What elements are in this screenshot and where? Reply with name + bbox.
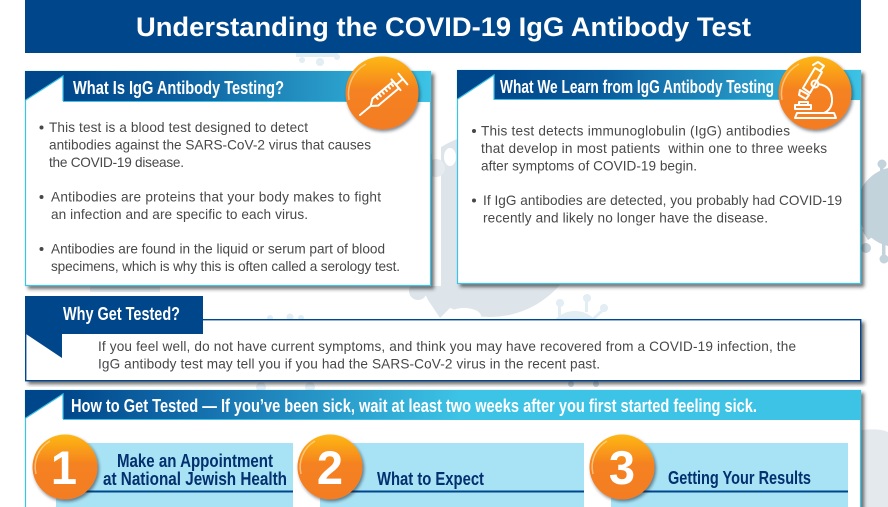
step 2: What to Expect [298, 434, 584, 507]
panel text: what is testing: Antibodies are found in the liquid or serum part of blood [51, 242, 385, 256]
panel header: How to Get Tested [25, 390, 861, 420]
step 1: Make an Appointment: at National Jewish Health [103, 469, 287, 489]
panel header: What Is IgG Antibody Testing [25, 71, 431, 102]
tab: Why Get Tested heading [25, 296, 203, 358]
panel text: what is testing: the COVID-19 disease. [49, 155, 184, 170]
step 1: Make an Appointment: Make an Appointment [117, 451, 273, 471]
title banner [25, 0, 861, 53]
text: why get tested [98, 339, 796, 372]
panel text: what is testing: Antibodies are proteins that your body makes to fight [51, 190, 381, 204]
panel text: what we learn [472, 124, 842, 226]
step 2: What to Expect: 2 [317, 441, 343, 494]
panel text: what is testing: This test is a blood test designed to detect [49, 120, 308, 135]
panel header: What We Learn: What We Learn from IgG Antibody Testing [500, 76, 774, 97]
panel text: what we learn: recently and likely no longer have the disease. [483, 210, 768, 226]
text: why get tested: IgG antibody test may tell you if you had the SARS-CoV-2 virus in the recent past. [98, 356, 600, 372]
panel: How to Get Tested [25, 390, 861, 507]
step 3: Getting Your Results: Getting Your Results [668, 468, 811, 488]
panel text: what we learn: after symptoms of COVID-19 begin. [481, 158, 697, 174]
step 3: Getting Your Results: 3 [609, 441, 635, 494]
panel: What Is IgG Antibody Testing [25, 56, 431, 286]
panel text: what is testing: specimens, which is why this is often called a serology test. [51, 259, 400, 274]
step 1: Make an Appointment: 1 [51, 441, 77, 494]
step 1: Make an Appointment [32, 434, 293, 507]
icon: microscope [778, 56, 852, 130]
text: why get tested: If you feel well, do not have current symptoms, and think you may have recovered from a COVID-19 infection, the [98, 339, 796, 354]
panel text: what we learn: that develop in most patients within one to three weeks [481, 141, 827, 156]
panel header: What We Learn [457, 70, 861, 100]
panel text: what we learn: If IgG antibodies are detected, you probably had COVID-19 [483, 193, 842, 208]
step 2: What to Expect: What to Expect [377, 469, 484, 489]
panel: Why Get Tested [25, 296, 861, 381]
panel text: what is testing: antibodies against the SARS-CoV-2 virus that causes [49, 138, 371, 152]
panel text: what is testing: an infection and are specific to each virus. [51, 207, 308, 222]
icon: syringe [346, 56, 418, 130]
panel text: what is testing [40, 120, 400, 274]
panel header: What Is IgG Antibody Testing: What Is IgG Antibody Testing? [73, 77, 284, 98]
title banner: Understanding the COVID-19 IgG Antibody Test [136, 12, 751, 42]
step 3: Getting Your Results [590, 434, 848, 507]
panel: What We Learn from IgG Antibody Testing [457, 56, 861, 284]
panel text: what we learn: This test detects immunoglobulin (IgG) antibodies [481, 124, 790, 138]
tab: Why Get Tested heading: Why Get Tested? [63, 303, 180, 324]
